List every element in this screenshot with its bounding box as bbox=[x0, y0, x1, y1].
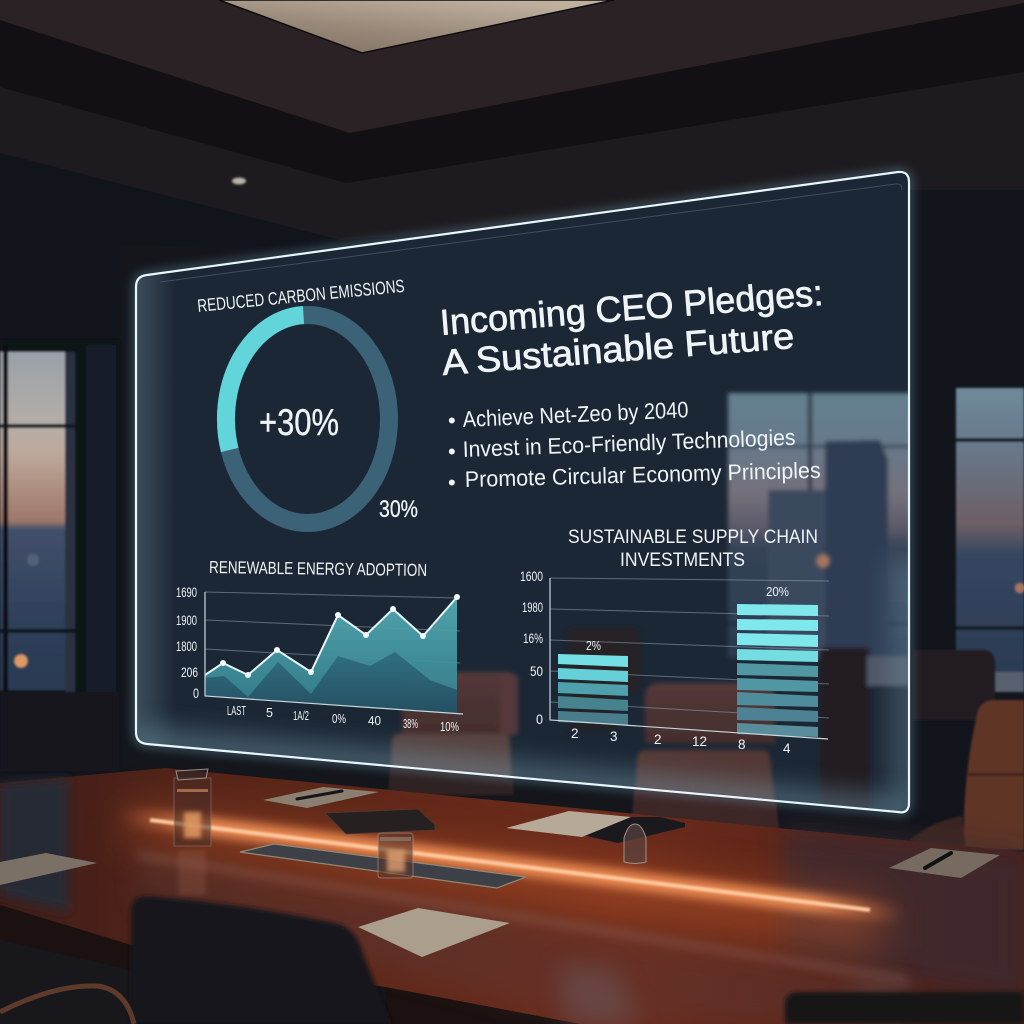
line chart x labels: 1A/2 bbox=[293, 708, 309, 723]
line chart y labels bbox=[176, 585, 199, 701]
bar chart heading bbox=[568, 526, 818, 571]
window through glass bbox=[728, 393, 913, 660]
bar chart x labels: 4 bbox=[783, 741, 791, 756]
tall carafe bbox=[174, 769, 211, 895]
left edge sheen bbox=[137, 275, 168, 744]
panel inner border bbox=[160, 184, 902, 282]
line chart x labels: 38% bbox=[403, 716, 418, 731]
bar chart y labels: 1980 bbox=[522, 600, 543, 615]
left window bbox=[0, 340, 120, 772]
line chart x labels: 5 bbox=[266, 705, 273, 720]
notepad left edge bbox=[0, 853, 97, 885]
background chairs behind the table bbox=[388, 650, 1024, 850]
bar chart heading: INVESTMENTS bbox=[620, 549, 745, 571]
tall bar bbox=[737, 604, 818, 737]
bar value labels bbox=[586, 584, 789, 653]
pledge bullets: • bbox=[448, 408, 456, 433]
pledge bullets: Invest in Eco-Friendly Technologies bbox=[462, 425, 796, 462]
bar chart x labels: 8 bbox=[738, 737, 746, 752]
panel border bbox=[136, 172, 909, 812]
line chart heading: RENEWABLE ENERGY ADOPTION bbox=[209, 557, 427, 580]
line chart y labels: 206 bbox=[181, 665, 198, 680]
table light streak bbox=[118, 810, 905, 950]
pledge bullets: Promote Circular Economy Principles bbox=[464, 458, 821, 492]
bar chart x labels: 12 bbox=[692, 734, 707, 749]
line chart y labels: 1690 bbox=[176, 585, 197, 600]
donut corner value: 30% bbox=[379, 496, 418, 523]
beige folder and black tablet bbox=[506, 811, 685, 843]
line chart x labels: LAST bbox=[227, 703, 246, 718]
bar chart x labels: 2 bbox=[654, 732, 662, 747]
glass panel bbox=[130, 160, 915, 828]
bar chart y labels: 16% bbox=[523, 631, 543, 646]
bar chart y labels: 1600 bbox=[520, 569, 543, 584]
right window, outside the panel bbox=[910, 190, 1024, 830]
bar chart x labels: 2 bbox=[571, 726, 579, 741]
title: Incoming CEO Pledges: bbox=[438, 272, 824, 343]
line chart x labels: 40 bbox=[368, 713, 381, 728]
foreground chair bbox=[131, 896, 1024, 1024]
bar chart x labels bbox=[571, 726, 791, 756]
notepad right bbox=[889, 848, 1000, 878]
bar chart: supply chain investments bbox=[520, 526, 829, 756]
room furniture through glass bbox=[390, 628, 908, 808]
donut heading: REDUCED CARBON EMISSIONS bbox=[196, 276, 405, 316]
tray bbox=[240, 844, 526, 888]
donut chart bbox=[226, 315, 418, 523]
pledge bullets: Achieve Net-Zeo by 2040 bbox=[462, 397, 689, 432]
line chart y labels: 1800 bbox=[176, 639, 197, 654]
line chart area bbox=[205, 597, 457, 713]
title bbox=[438, 272, 824, 383]
panel contents seen through glass bbox=[130, 160, 915, 828]
small bottle bbox=[624, 824, 646, 864]
bar value labels: 20% bbox=[766, 584, 789, 599]
bar value labels: 2% bbox=[586, 638, 601, 653]
panel lower edge sheen bbox=[136, 742, 909, 814]
chair arm, lower left bbox=[0, 986, 134, 1024]
line chart y labels: 1900 bbox=[176, 613, 197, 628]
title: A Sustainable Future bbox=[440, 315, 796, 383]
pledge bullets: • bbox=[448, 439, 456, 464]
donut centre value: +30% bbox=[259, 402, 339, 443]
line chart y labels: 0 bbox=[193, 686, 199, 701]
pledge bullets bbox=[448, 397, 821, 495]
line chart x labels bbox=[227, 703, 459, 734]
notepad front bbox=[358, 908, 510, 957]
notepad with pen, back left bbox=[263, 787, 379, 808]
line chart x labels: 10% bbox=[440, 719, 459, 734]
bar chart y labels: 50 bbox=[530, 664, 543, 679]
recessed spotlight bbox=[232, 178, 246, 184]
ceiling light panel bbox=[219, 0, 614, 53]
line chart x labels: 0% bbox=[332, 711, 346, 726]
panel outer glow bbox=[136, 172, 909, 812]
water glass bbox=[378, 833, 413, 878]
bar chart heading: SUSTAINABLE SUPPLY CHAIN bbox=[568, 526, 818, 548]
bar chart x labels: 3 bbox=[610, 729, 618, 744]
line chart: renewable energy adoption bbox=[176, 557, 463, 734]
bar chart y labels bbox=[520, 569, 543, 727]
bar chart y labels: 0 bbox=[536, 712, 543, 727]
short bar bbox=[558, 654, 628, 725]
pledge bullets: • bbox=[448, 470, 456, 495]
dark folder bbox=[325, 809, 435, 834]
table bbox=[0, 768, 1024, 1024]
